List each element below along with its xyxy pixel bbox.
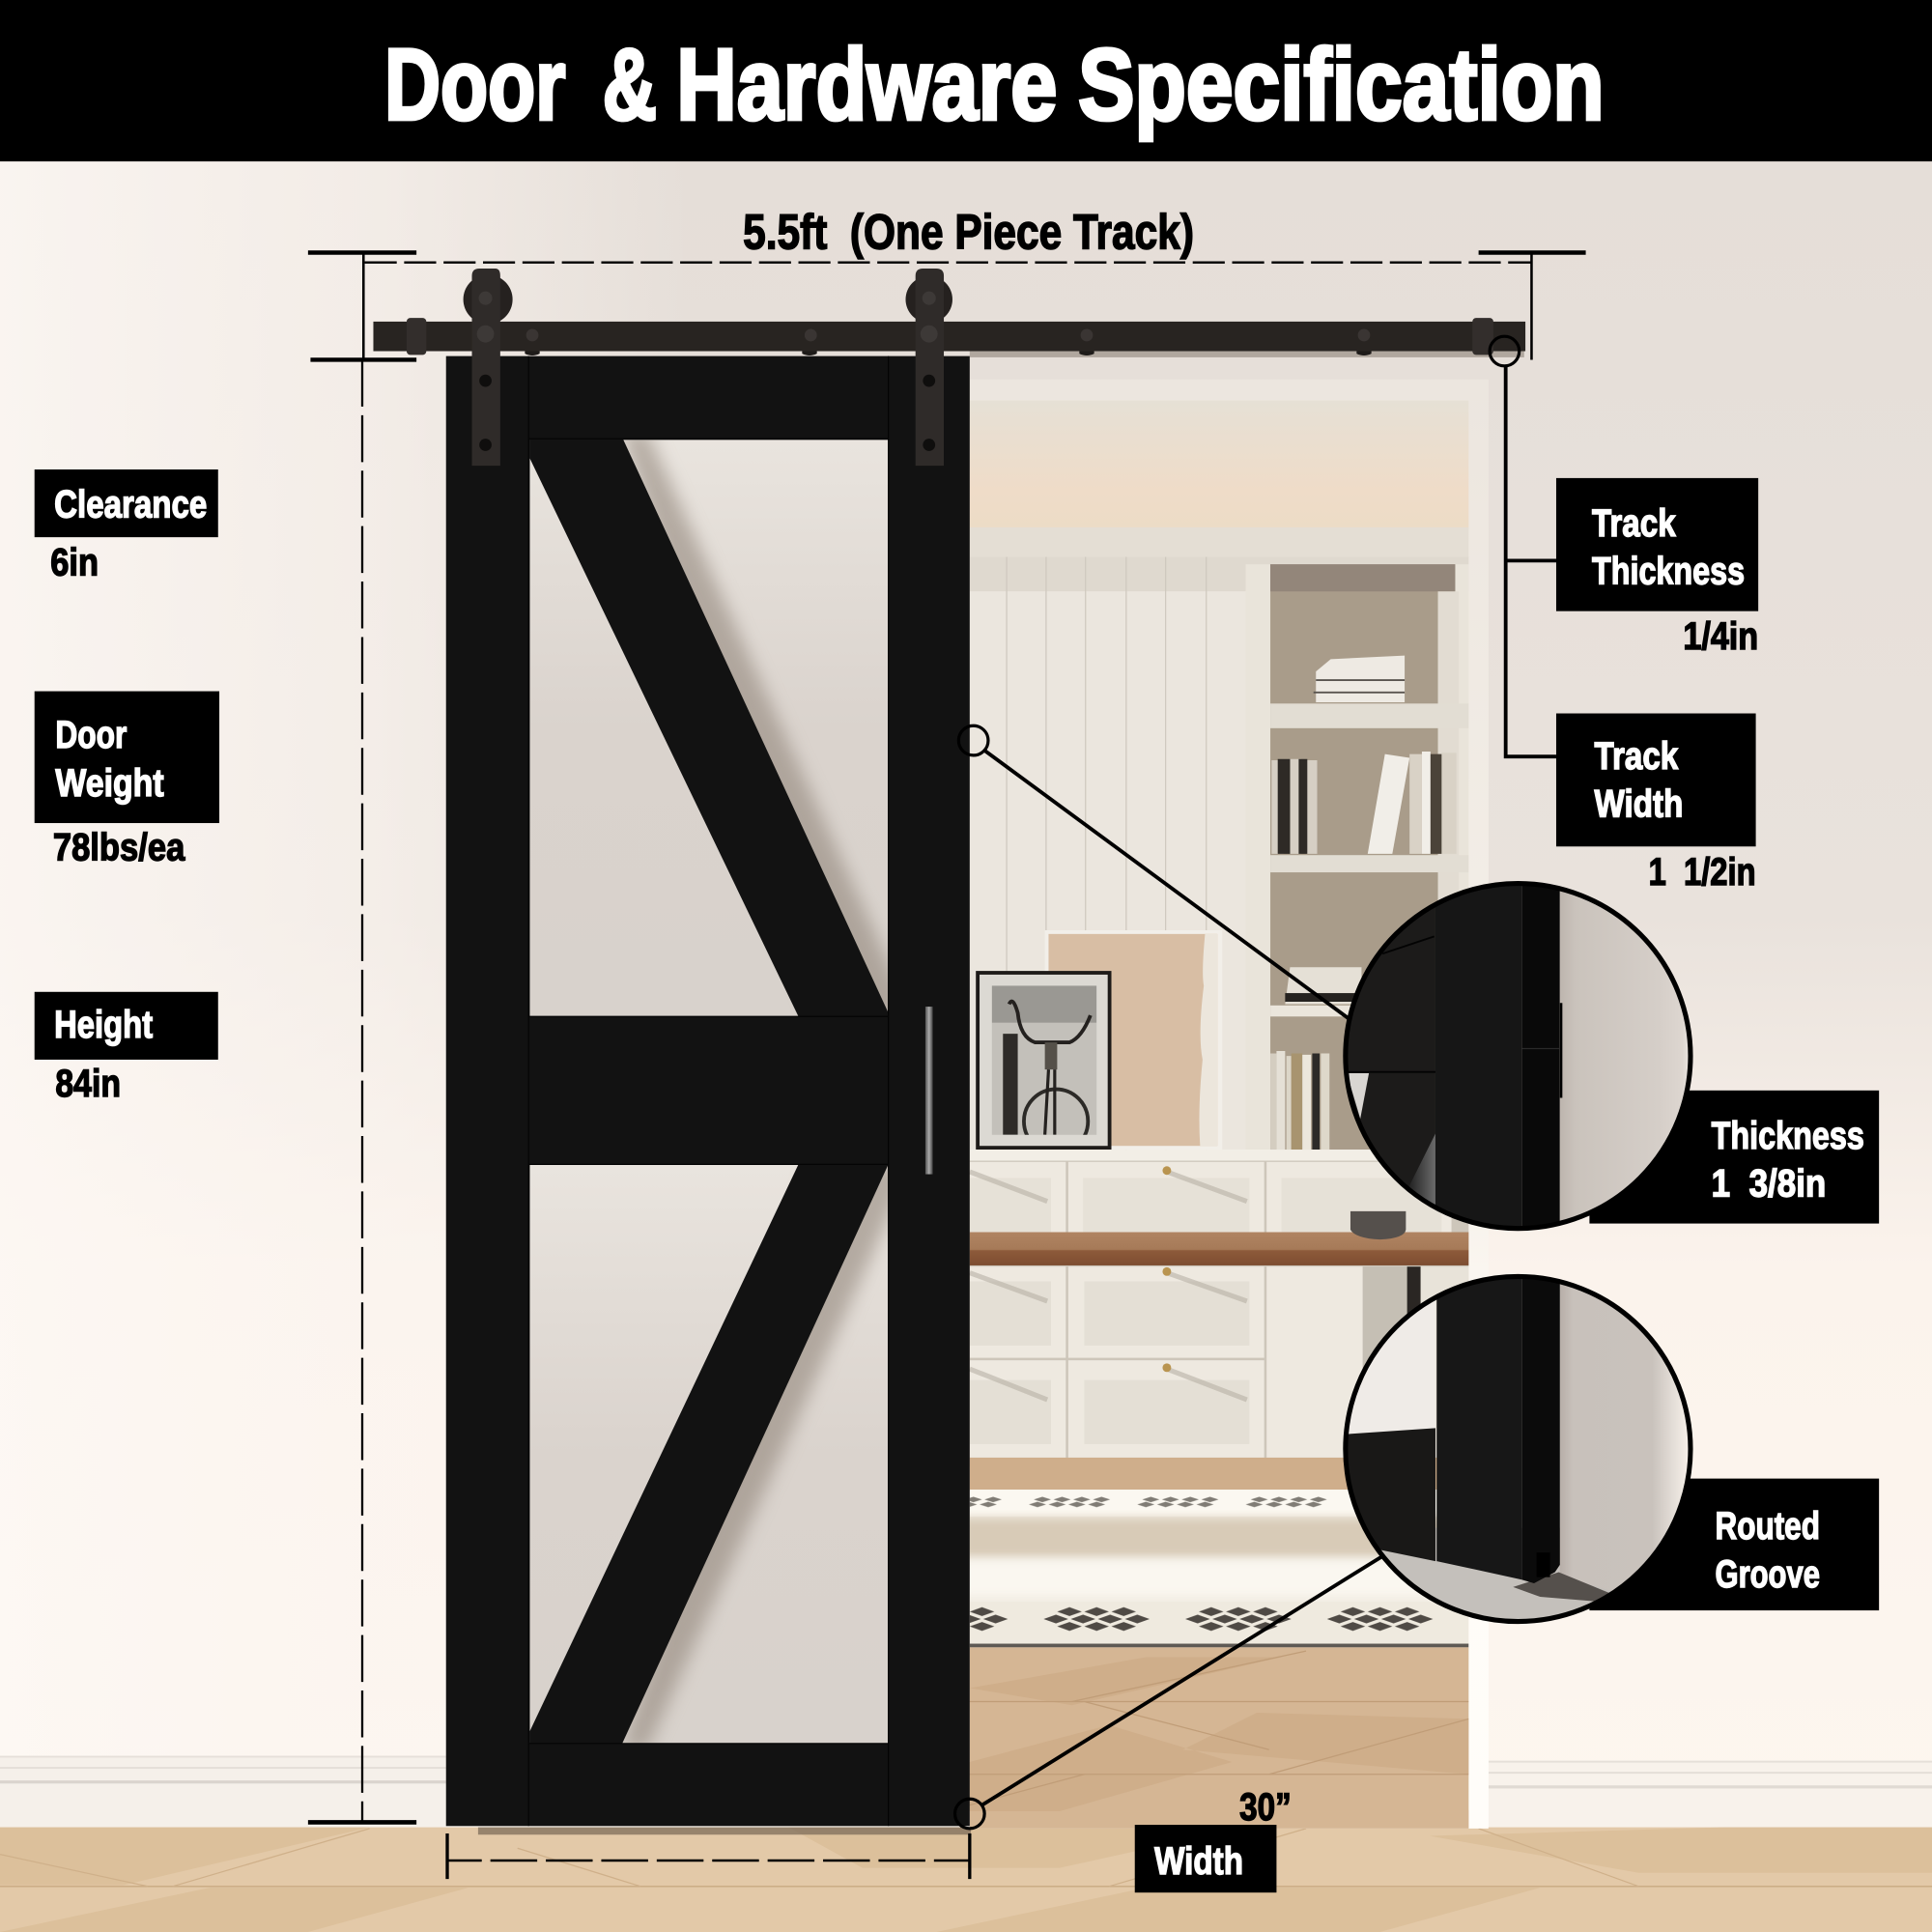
barn door (446, 356, 970, 1826)
shelving unit (1246, 564, 1468, 1162)
callout: clearance (35, 469, 218, 584)
callout: width (1135, 1786, 1292, 1892)
crown moulding (970, 527, 1468, 557)
door opening frame (970, 380, 1489, 1829)
title: Door (384, 29, 565, 142)
callout: track width: Width (1595, 783, 1683, 826)
rug (961, 1490, 1479, 1647)
door handle (925, 1007, 933, 1175)
door floor shadow (478, 1828, 971, 1834)
interior floor (970, 1458, 1468, 1491)
callout: track width: Track (1595, 735, 1679, 778)
door width dimension (447, 1833, 970, 1879)
sliding track (373, 318, 1525, 355)
upper panel band (970, 557, 1468, 591)
callout: thickness: 1 3/8in (1712, 1163, 1826, 1206)
door height dimension (308, 359, 416, 1822)
callout: door weight (35, 692, 219, 868)
track length dimension (308, 205, 1586, 359)
callout: track width: 1 1/2in (1649, 851, 1756, 894)
doorway interior room (961, 380, 1489, 1829)
callout: track thickness: Track (1592, 502, 1677, 545)
framed abstract art (1045, 930, 1222, 1150)
left roller hanger (464, 269, 513, 466)
title (384, 29, 1605, 142)
track leader lines (1490, 336, 1556, 756)
callout: thickness: Thickness (1712, 1115, 1864, 1157)
leader: door bottom to groove zoom (955, 1556, 1382, 1829)
door jamb (970, 380, 1489, 1828)
callout: door weight: Door (55, 714, 127, 756)
callout: door weight: 78lbs/ea (53, 826, 185, 868)
callout: thickness (1589, 1091, 1879, 1224)
table top (970, 1233, 1468, 1265)
callout: routed groove: Groove (1716, 1553, 1820, 1596)
callout: height: Height (54, 1004, 153, 1046)
callout: height: 84in (55, 1063, 121, 1105)
callout: track thickness: 1/4in (1683, 615, 1758, 658)
callout: height (35, 992, 218, 1105)
baseboard (0, 1756, 1932, 1828)
callout: width: 30” (1239, 1786, 1292, 1829)
callout: clearance: Clearance (54, 484, 207, 526)
track shadow on frame (970, 352, 1524, 357)
callout: routed groove: Routed (1716, 1505, 1820, 1548)
right roller hanger (906, 269, 952, 466)
upper glass panel (529, 440, 889, 1016)
title: & (603, 29, 657, 142)
bowl on table (1350, 1211, 1406, 1239)
framed bicycle photo (976, 971, 1112, 1153)
track length label: 5.5ft (One Piece Track) (743, 205, 1194, 260)
panel shadows (622, 431, 913, 1749)
callout: track thickness: Thickness (1592, 551, 1745, 593)
callout: clearance: 6in (50, 542, 99, 584)
callout: width: Width (1154, 1840, 1243, 1883)
ceiling glow (970, 401, 1468, 529)
wood floor (0, 1828, 1932, 1932)
leader: door edge to thickness zoom (958, 725, 1350, 1019)
header bar (0, 0, 1932, 161)
zoom circle: routed groove (1346, 1276, 1691, 1627)
title: Specification (1078, 29, 1605, 142)
zoom circle: door thickness (1346, 882, 1691, 1230)
title: Hardware (676, 29, 1057, 142)
beadboard wall (970, 557, 1247, 1152)
callout: track width (1556, 714, 1756, 894)
lower diagonal brace (529, 1164, 889, 1744)
callout: door weight: Weight (55, 762, 164, 805)
base cabinets (970, 1150, 1468, 1466)
lower glass panel (529, 1164, 889, 1744)
callout: routed groove (1589, 1479, 1879, 1610)
callout: track thickness (1556, 478, 1758, 658)
interior wood floor (970, 1647, 1468, 1829)
upper diagonal brace (529, 438, 889, 1016)
rails and stiles (528, 356, 889, 1826)
